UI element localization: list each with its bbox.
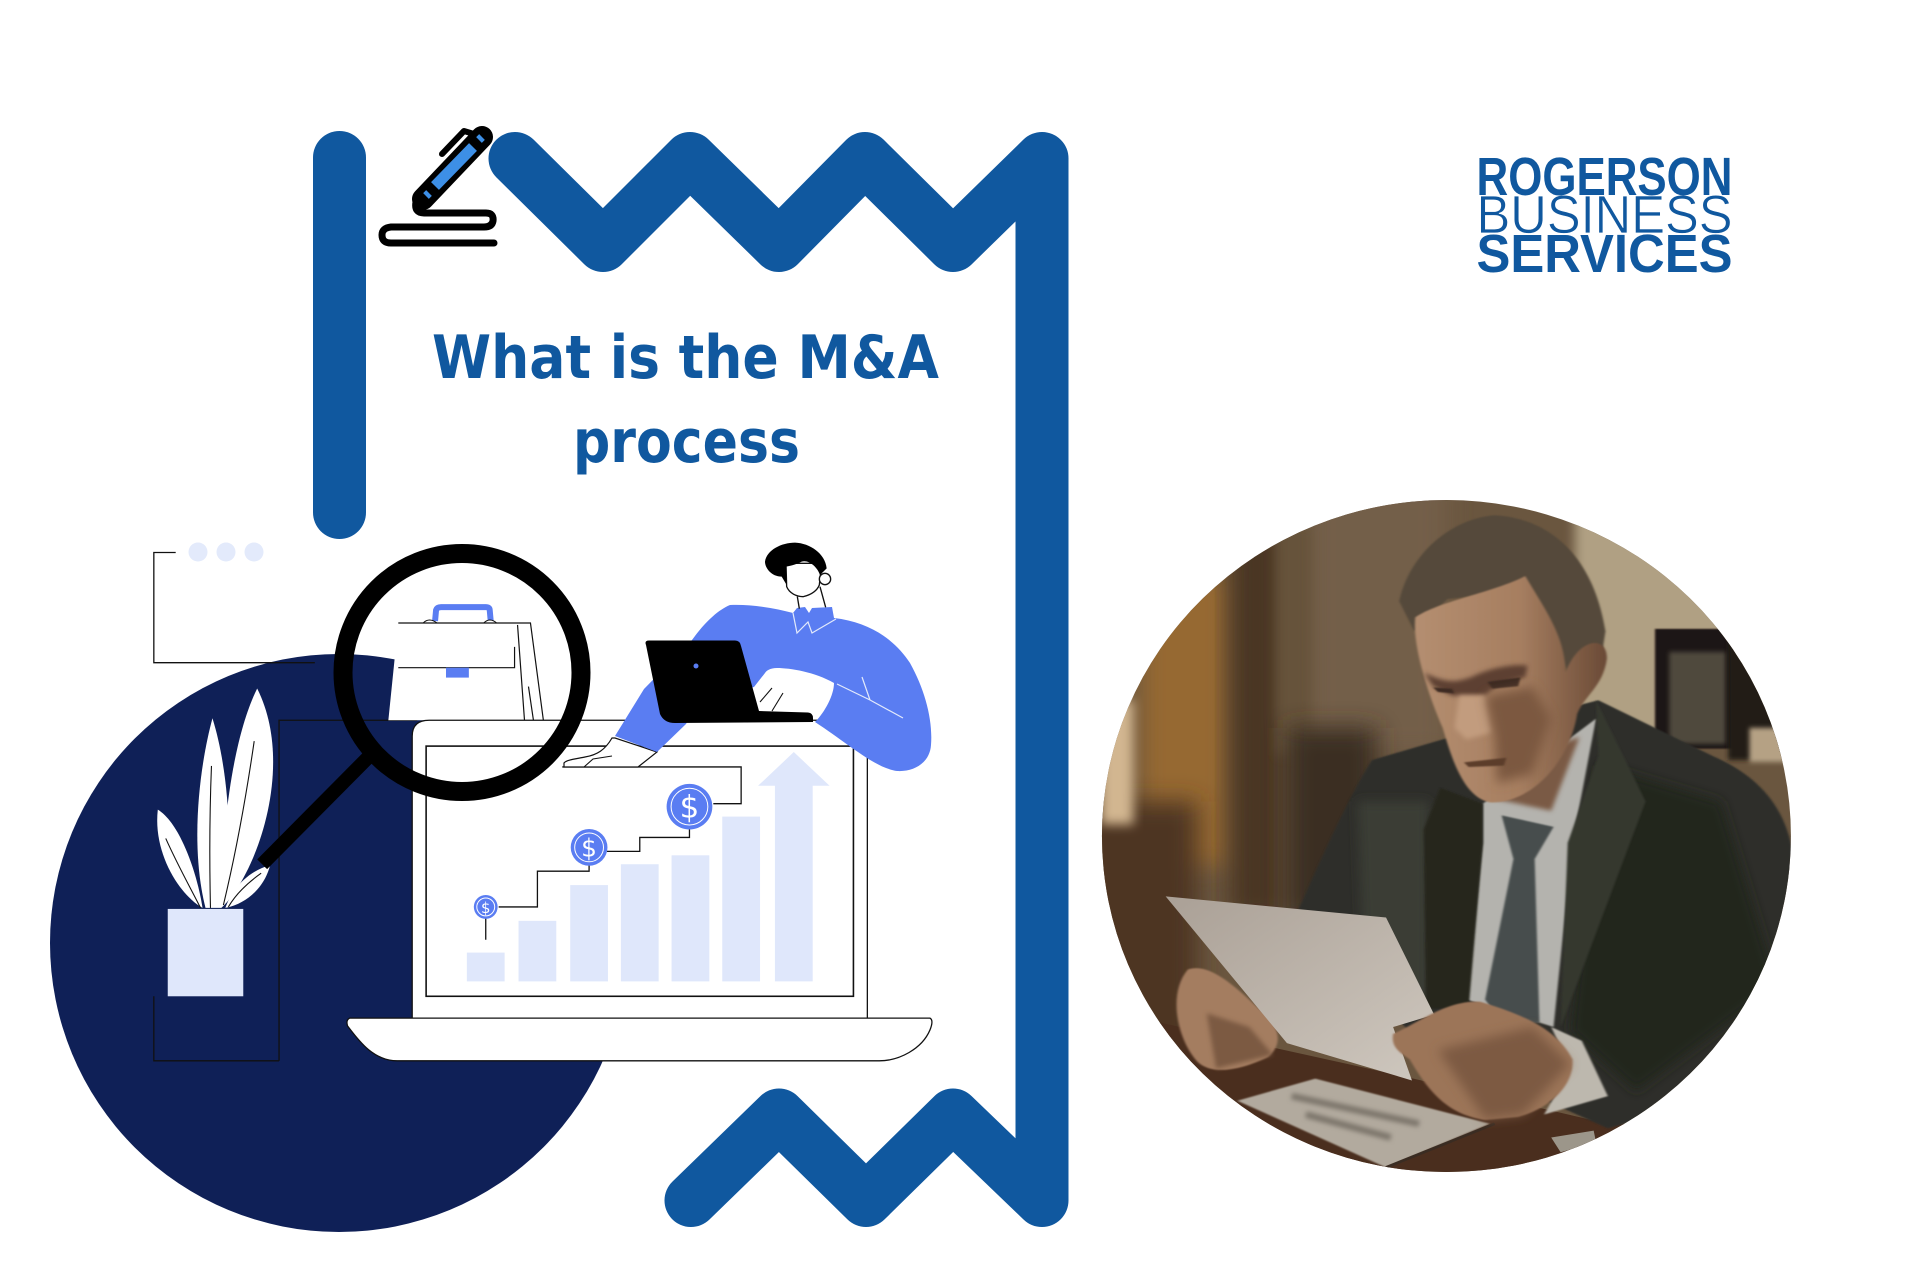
laptop base (347, 1018, 932, 1061)
hair (1399, 515, 1605, 677)
tie (1485, 815, 1554, 1027)
title: What is the M&A (432, 323, 939, 393)
dollar coins: $ (481, 899, 490, 917)
illustration group (154, 553, 932, 1061)
laptop lid (412, 720, 867, 1018)
title: process (573, 407, 800, 477)
sweater fold lines (793, 613, 903, 718)
open laptop held by person (646, 640, 813, 723)
photo background (1102, 500, 1791, 1172)
plant pot (168, 909, 243, 996)
shirt (1466, 719, 1596, 1027)
magnifier handle (262, 756, 369, 864)
plant leaves (157, 689, 273, 908)
neck shadow (1485, 737, 1580, 811)
photo: man in suit reading a document (1102, 500, 1791, 1172)
decorative dots (188, 542, 264, 562)
person leaning on laptop (564, 543, 931, 771)
magnifier ring (343, 554, 581, 792)
briefcase (388, 607, 543, 720)
logo: Rogerson Business Services: ROGERSON (1476, 147, 1732, 207)
laptop screen (426, 746, 853, 996)
plant (157, 689, 273, 996)
small object on desk (1551, 1131, 1596, 1152)
frame: top zigzag, right bar and bottom zigzag (515, 158, 1042, 1200)
connector bracket lines (154, 553, 417, 1061)
dark navy circle (50, 654, 628, 1232)
step line connecting coins (486, 767, 741, 940)
lapels (1561, 700, 1646, 1027)
logo: Rogerson Business Services (1476, 147, 1732, 284)
finger lines (584, 688, 783, 767)
document on desk (1237, 1079, 1490, 1167)
face shading: brow and eyes (1424, 665, 1528, 696)
frame: left vertical bar (313, 158, 366, 512)
face (1415, 576, 1607, 802)
dollar coins: $ (581, 833, 597, 862)
dollar coins: $ (680, 790, 699, 826)
shirt cuff (1544, 1027, 1608, 1115)
logo: Rogerson Business Services: BUSINESS (1476, 185, 1732, 245)
right hand (1393, 1002, 1573, 1120)
shelf (1655, 629, 1735, 749)
plant leaf veins (166, 741, 261, 908)
person hand (564, 738, 657, 767)
document held (1166, 896, 1434, 1080)
growth arrow (758, 752, 830, 981)
suit (1296, 700, 1792, 1128)
left hand (1177, 968, 1278, 1070)
laptop (347, 720, 932, 1061)
title (432, 323, 939, 477)
dollar coins (474, 784, 712, 919)
icon: pen writing (382, 131, 494, 243)
head (765, 543, 831, 609)
sweater (615, 605, 931, 771)
bar chart on screen (467, 752, 830, 981)
logo: Rogerson Business Services: SERVICES (1476, 224, 1732, 284)
desk (1160, 1022, 1624, 1172)
